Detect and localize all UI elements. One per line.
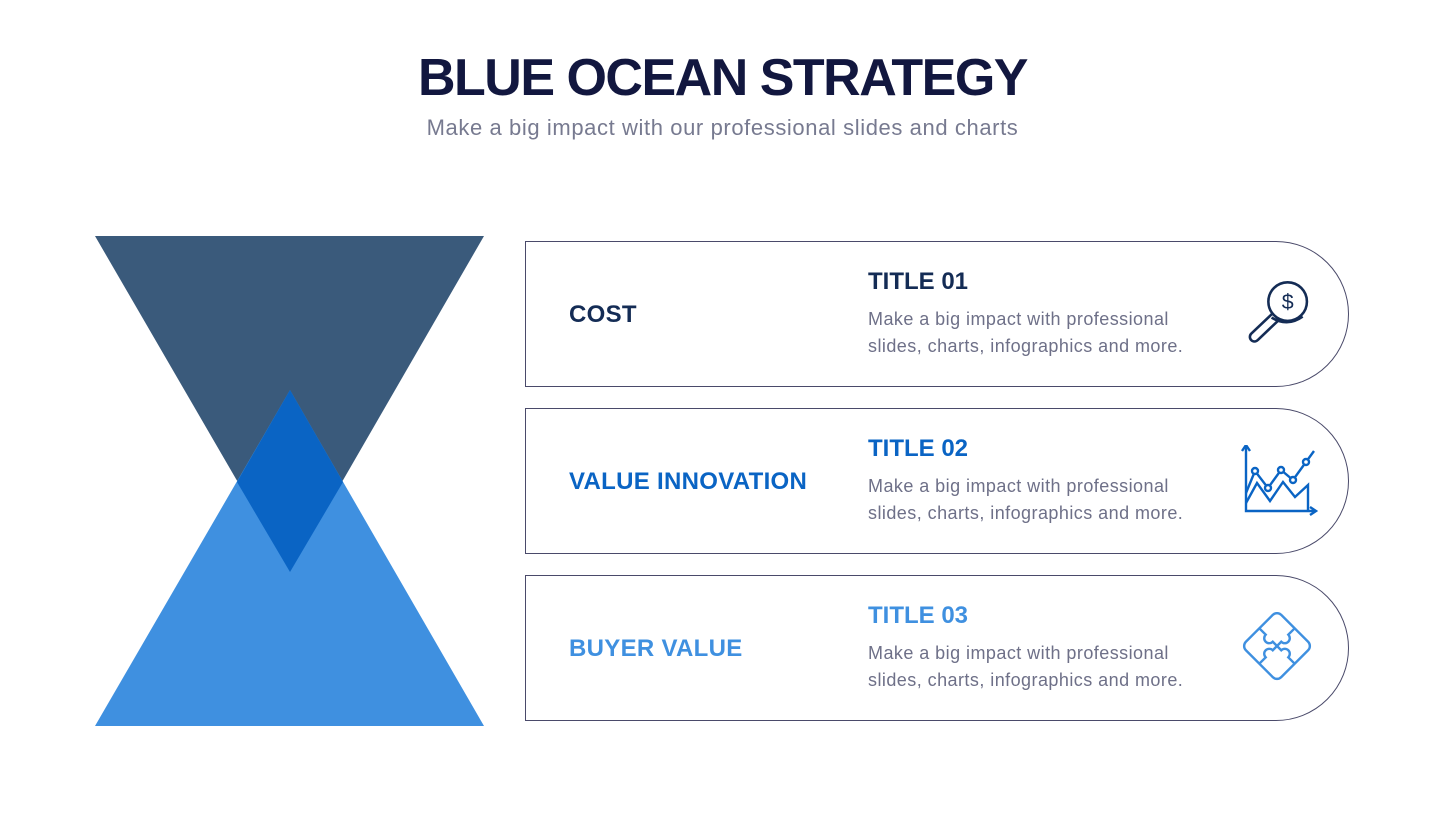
card 2: value innovation: VALUE INNOVATION bbox=[569, 468, 807, 495]
card 3: buyer value: slides, charts, infographics and more. bbox=[868, 670, 1183, 690]
card 2: value innovation: Make a big impact with professional bbox=[868, 476, 1169, 496]
card 1: cost: Make a big impact with professional bbox=[868, 309, 1169, 329]
card 1: cost bbox=[525, 241, 1349, 387]
card 1: cost: slides, charts, infographics and more. bbox=[868, 336, 1183, 356]
card 2: value innovation bbox=[525, 408, 1349, 554]
card 2: value innovation: TITLE 02 bbox=[868, 435, 968, 462]
card 2: value innovation: slides, charts, infographics and more. bbox=[868, 503, 1183, 523]
icon: magnifier dollar bbox=[1248, 281, 1308, 343]
card 3: buyer value: TITLE 03 bbox=[868, 602, 968, 629]
icon: puzzle bbox=[1242, 612, 1312, 680]
title: BLUE OCEAN STRATEGY bbox=[418, 49, 1027, 107]
icon: magnifier dollar: $ bbox=[1282, 290, 1294, 314]
card 1: cost: COST bbox=[569, 301, 637, 328]
card 3: buyer value: BUYER VALUE bbox=[569, 635, 743, 662]
subtitle: Make a big impact with our professional slides and charts bbox=[427, 115, 1018, 140]
card 3: buyer value: Make a big impact with professional bbox=[868, 643, 1169, 663]
icon: line chart bbox=[1241, 445, 1318, 516]
card 3: buyer value bbox=[525, 575, 1349, 721]
hourglass triangles bbox=[95, 236, 484, 726]
card 1: cost: TITLE 01 bbox=[868, 268, 968, 295]
